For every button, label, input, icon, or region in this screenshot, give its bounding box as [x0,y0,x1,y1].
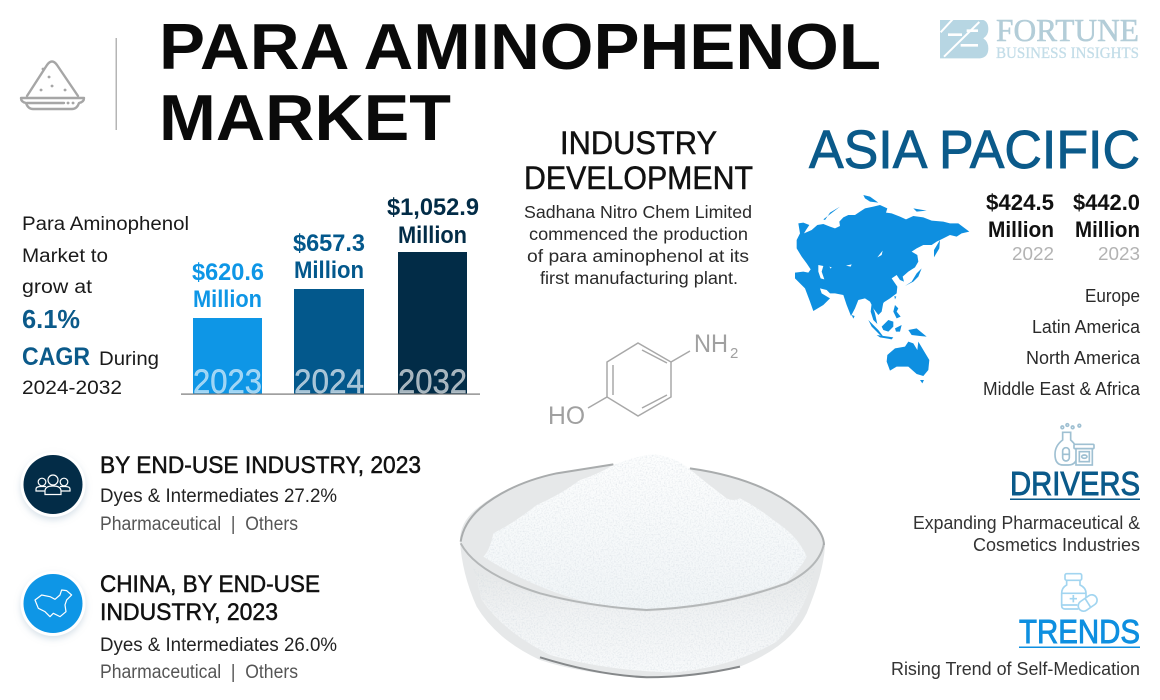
dish rim back [461,464,824,545]
photo: white powder in a glass dish [460,454,825,677]
bar 2032: 2032 [398,363,467,401]
text: by end-use industry: Pharmaceutical | Others [100,514,298,535]
Asia Pacific values: Million [988,217,1054,242]
heading: industry development: DEVELOPMENT [524,160,753,196]
text: industry development detail [524,202,752,288]
logo: Fortune Business Insights [940,12,1139,62]
list: other regions: Middle East & Africa [983,379,1141,399]
icon: medicine bottle and capsule [1062,574,1099,613]
logo: Fortune Business Insights: BUSINESS INSIGHTS [996,45,1139,62]
list: other regions [983,286,1141,399]
logo mark [940,19,988,58]
text: China by end-use industry: Dyes & Intermediates 26.0% [100,635,337,656]
glass dish body [460,464,825,677]
lakes [818,251,883,279]
bar 2024: Million [294,257,364,284]
icon: powder pile on a plate [21,62,84,109]
dish rim front [461,543,824,610]
text: growth summary [22,214,189,399]
text: China by end-use industry [100,571,337,683]
islands [823,195,940,339]
bar chart: market size [181,194,480,401]
heading: industry development [524,125,753,196]
icon: people in navy circle [20,452,86,517]
text: industry development detail: Sadhana Nitro Chem Limited [524,202,752,222]
text: trends detail: Rising Trend of Self-Medication [891,659,1140,679]
text: by end-use industry: BY END-USE INDUSTRY, 2023 [100,452,421,479]
title: MARKET [159,81,451,154]
icon: flask and jar [1055,424,1094,465]
logo: Fortune Business Insights: FORTUNE [996,12,1139,48]
Asia Pacific values: 2022 [1012,244,1054,264]
heading: industry development: INDUSTRY [560,125,717,161]
text: China by end-use industry: INDUSTRY, 2023 [100,599,278,626]
map: Asia Pacific [795,195,969,383]
text: drivers detail: Expanding Pharmaceutical & [913,513,1140,533]
heading: trends: TRENDS [1019,613,1140,650]
text: growth summary: During [99,349,159,370]
bar 2032: Million [398,222,467,249]
list: other regions: Latin America [1032,317,1141,337]
bar 2023: $620.6 [192,259,264,286]
chemical structure: para aminophenol: NH [694,330,728,358]
text: growth summary: 2024-2032 [22,378,122,399]
list: other regions: Europe [1085,286,1140,306]
text: by end-use industry: Dyes & Intermediates 27.2% [100,486,337,507]
text: drivers detail [913,513,1140,555]
bar 2032: $1,052.9 [387,194,479,221]
bar 2023: 2023 [193,363,262,401]
Asia Pacific values: $442.0 [1073,190,1140,215]
Asia Pacific values: $424.5 [986,190,1054,215]
chemical structure: para aminophenol: 2 [730,345,738,362]
text: growth summary: Para Aminophenol [22,214,189,235]
title: PARA AMINOPHENOL [159,10,881,83]
bar 2024: $657.3 [293,230,365,257]
text: China by end-use industry: Pharmaceutical | Others [100,662,298,683]
icon: China map in blue circle [20,571,86,636]
heading: drivers: DRIVERS [1010,465,1140,502]
bar 2023 [192,259,264,401]
chemical structure: para aminophenol [548,330,738,430]
bar 2024 [293,230,365,401]
dish base [540,657,740,677]
text: industry development detail: of para aminophenol at its [527,246,749,266]
text: drivers detail: Cosmetics Industries [973,535,1140,555]
chemical structure: para aminophenol: HO [548,402,585,430]
text: by end-use industry [100,452,421,535]
mainland Asia [795,205,969,316]
text: industry development detail: commenced the production [529,224,748,244]
text: growth summary: CAGR [22,343,90,371]
divider line [116,38,117,130]
title [159,10,881,154]
text: Asia Pacific heading: ASIA PACIFIC [809,120,1140,180]
Asia Pacific values [986,190,1140,264]
text: industry development detail: first manufacturing plant. [540,268,738,288]
Asia Pacific values: 2023 [1098,244,1140,264]
Asia Pacific values: Million [1075,217,1140,242]
text: growth summary: grow at [22,277,93,298]
powder pile [483,454,807,609]
bar 2023: Million [193,286,262,313]
powder below the rim [473,567,815,673]
Australia [887,342,929,383]
text: growth summary: Market to [22,246,108,267]
bar 2024: 2024 [294,363,364,401]
text: China by end-use industry: CHINA, BY END-USE [100,571,320,598]
text: growth summary: 6.1% [22,304,80,334]
list: other regions: North America [1026,348,1141,368]
bar 2032 [387,194,479,401]
